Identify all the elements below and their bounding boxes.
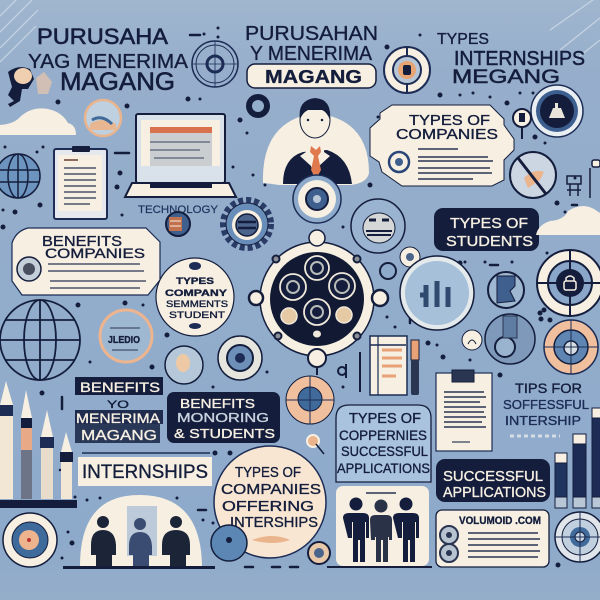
hub rivets [272,256,360,340]
dark pill: benefits mentoring students: MONORING [177,410,269,425]
oval: types of companies offering internships: COMPANIES [221,481,321,498]
label stack: benefits menerima magang: MENERIMA [76,410,161,426]
body lines [418,149,493,179]
dark pill: benefits mentoring students [167,392,280,443]
icon: dark circle top right [531,85,583,137]
icon: lens circle [218,336,262,380]
icon: target disk bottom left [3,513,57,567]
body lines [48,264,146,288]
title block 3: INTERNSHIPS [454,48,585,70]
laptop screen content [150,127,212,166]
label stack: benefits menerima magang: MAGANG [81,427,157,444]
icon: peach badge: JLEDIO [108,335,140,346]
oval: types of companies offering internships [214,446,326,558]
icon: locked circle [513,109,531,139]
icon: figure with speech blob [8,67,52,107]
icon: slashed circle [510,152,556,198]
circle: chart glass [400,256,474,330]
panel: types of companies successful applications: COPPERNIES [339,428,427,443]
dark pill: types of students: STUDENTS [446,233,533,250]
icon: small ring circle [488,272,524,308]
icon: peach target center [286,376,334,424]
panel: types of companies: TYPES OF [409,112,490,129]
circle: top of hub [293,175,341,223]
pencil bar chart [0,381,77,508]
dome with three people [63,495,215,569]
oval: types companies students: SEMMENTS [166,299,228,309]
bar chart right [555,408,600,508]
dark pill: benefits mentoring students: & STUDENTS [174,426,275,441]
central hub [260,242,374,356]
small icon [389,152,409,172]
panel: types of companies successful applications: APPLICATIONS [337,461,430,476]
figure middle [370,500,392,562]
panel: types of companies: COMPANIES [396,126,498,143]
person right [162,516,190,567]
tips text: INTERSHIP [505,413,581,428]
cloud left [0,108,76,135]
panel: types of companies [370,105,514,186]
oval: types companies students [156,258,234,336]
magang pill [247,64,376,88]
cloud right [536,206,600,235]
icon: peach ring circle [85,100,121,136]
icon: crosshair target [537,250,600,316]
title block 1 [28,24,189,96]
dark pill: successful applications: SUCCESSFUL [443,468,543,485]
icon: peach target right [544,320,598,374]
icon: hand circle [165,346,203,384]
icon: peach target circle top [384,47,430,93]
decorative corner lines [0,0,600,62]
title block 3 [437,31,585,88]
title block 2 [245,23,378,88]
panel: internships: INTERNSHIPS [82,462,208,483]
tips text [503,380,589,436]
icon: documents with pen [370,336,419,395]
icon: gear [223,200,271,248]
icon: book circle [166,212,190,236]
title block 1: YAG MENERIMA [28,51,189,73]
person left [91,516,116,567]
dark pill: types of students: TYPES OF [450,215,528,232]
oval: types companies students: STUDENT [169,310,226,320]
panel: volumoid [436,510,549,567]
panel: types of companies successful applications: TYPES OF [349,410,421,427]
panel: benefits companies: BENEFITS [42,233,122,250]
icon: small peach pin [307,435,324,454]
person with suit [263,98,369,185]
icon: d glyph with line [338,352,360,392]
icon: small globe [0,154,40,198]
icon: small sign right [567,160,600,198]
title block 1: PURUSAHA [37,24,168,49]
oval: types companies students: TYPES [176,276,214,287]
panel: types of companies successful applications [336,405,431,482]
oval: types companies students: COMPANY [165,288,228,299]
panel: benefits companies: COMPANIES [45,245,145,261]
panel: internships [78,453,212,486]
panel: three people [327,486,432,567]
icon: head circle [462,330,482,350]
title block 2: PURUSAHAN [245,23,378,45]
icon: peach badge [100,310,152,362]
oval: types of companies offering internships: INTERSHIPS [230,514,318,531]
oval: types of companies offering internships: TYPES OF [235,464,301,481]
title block 1: MAGANG [60,68,175,96]
panel: types of companies successful applications: SUCCESSFUL [341,444,428,459]
figure left [343,498,369,562]
document with clip [436,370,492,451]
circle: face emblem [351,199,405,253]
large globe [0,300,80,380]
icon: small badge [246,94,270,118]
technology label: TECHNOLOGY [138,204,219,216]
person middle [129,518,152,567]
target bottom right [555,512,600,562]
dark pill: successful applications: APPLICATIONS [443,484,546,501]
figure right [393,498,419,562]
title block 3: MEGANG [452,67,560,88]
panel: volumoid: VOLUMOID .COM [459,515,541,527]
title block 2: MAGANG [265,67,362,87]
title block 2: Y MENERIMA [250,43,373,65]
icon: dark valve circle [485,314,535,364]
panel: benefits companies [12,228,160,295]
dark pill: benefits mentoring students: BENEFITS [180,396,255,411]
oval: types of companies offering internships: OFFERING [222,498,314,515]
label stack: benefits menerima magang: YO [107,399,130,411]
clipboard [54,146,107,219]
dark pill: successful applications [436,459,550,502]
icon: blue disk [211,525,247,561]
hub nodes [280,256,355,325]
laptop [125,114,236,197]
dark pill: types of students [434,208,539,251]
tips text: TIPS FOR [515,380,582,396]
icon: emblem circle top [192,41,238,87]
hub connectors [249,230,420,375]
label stack: benefits menerima magang [75,377,163,444]
badge [17,257,41,281]
title block 3: TYPES [437,31,489,48]
label stack: benefits menerima magang: BENEFITS [80,379,160,395]
badges [440,526,458,562]
icon: small medal bottom [308,542,330,564]
tips text: SOFFESSFUL [503,397,589,412]
